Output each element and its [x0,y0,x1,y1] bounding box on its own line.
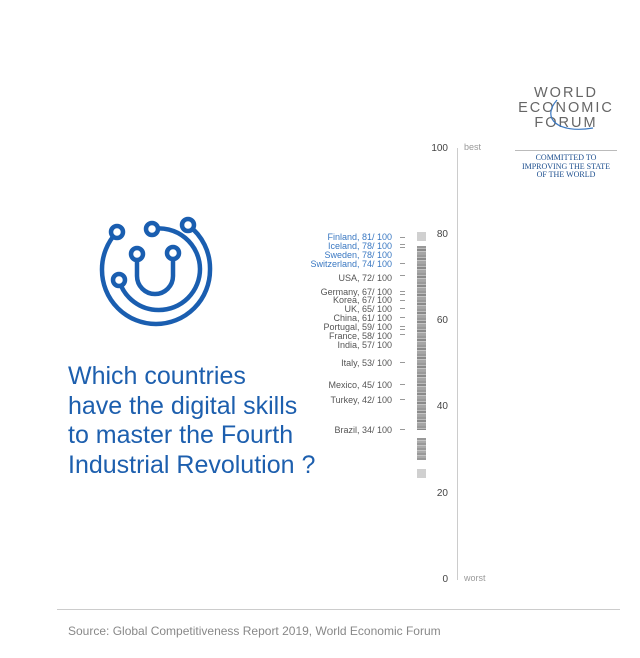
logo: World Economic Forum: ECONOMIC [518,100,614,116]
title: to master the Fourth [68,421,293,449]
country labels: Iceland, 78/ 100 [328,241,392,251]
logo: World Economic Forum: IMPROVING THE STATE [522,162,610,170]
logo: World Economic Forum [515,85,617,179]
country labels: Finland, 81/ 100 [327,232,392,242]
axis numbers: 100 [431,143,448,154]
logo: World Economic Forum: FORUM [534,115,598,131]
logo: World Economic Forum: OF THE WORLD [537,170,595,179]
axis numbers: 60 [437,315,448,326]
title [68,362,315,478]
distribution strip [417,232,426,478]
title: Which countries [68,362,246,390]
axis numbers: 80 [437,229,448,240]
country labels: UK, 65/ 100 [344,304,392,314]
title: Industrial Revolution ? [68,450,315,478]
country labels: Korea, 67/ 100 [333,295,392,305]
country labels: China, 61/ 100 [333,313,392,323]
country labels [310,232,405,435]
axis numbers: 20 [437,488,448,499]
title: have the digital skills [68,392,297,420]
country labels: France, 58/ 100 [329,331,392,341]
source: Source: Global Competitiveness Report 2019, World Economic Forum [68,624,441,638]
country labels: Portugal, 59/ 100 [323,322,392,332]
axis: best [464,142,481,152]
country labels: Sweden, 78/ 100 [324,250,392,260]
country labels: Italy, 53/ 100 [341,358,392,368]
axis numbers: 40 [437,401,448,412]
country labels: Germany, 67/ 100 [321,287,392,297]
logo: World Economic Forum: WORLD [534,85,598,101]
axis: worst [464,573,486,583]
country labels: Switzerland, 74/ 100 [310,259,392,269]
country labels: India, 57/ 100 [337,340,392,350]
country labels: USA, 72/ 100 [338,273,392,283]
icon: circuit arcs [100,216,212,326]
axis numbers: 0 [442,574,448,585]
country labels: Turkey, 42/ 100 [330,395,392,405]
country labels: Brazil, 34/ 100 [334,425,392,435]
axis [457,142,486,583]
country labels: Mexico, 45/ 100 [328,380,392,390]
logo: World Economic Forum: COMMITTED TO [536,153,596,162]
axis numbers [431,143,448,585]
